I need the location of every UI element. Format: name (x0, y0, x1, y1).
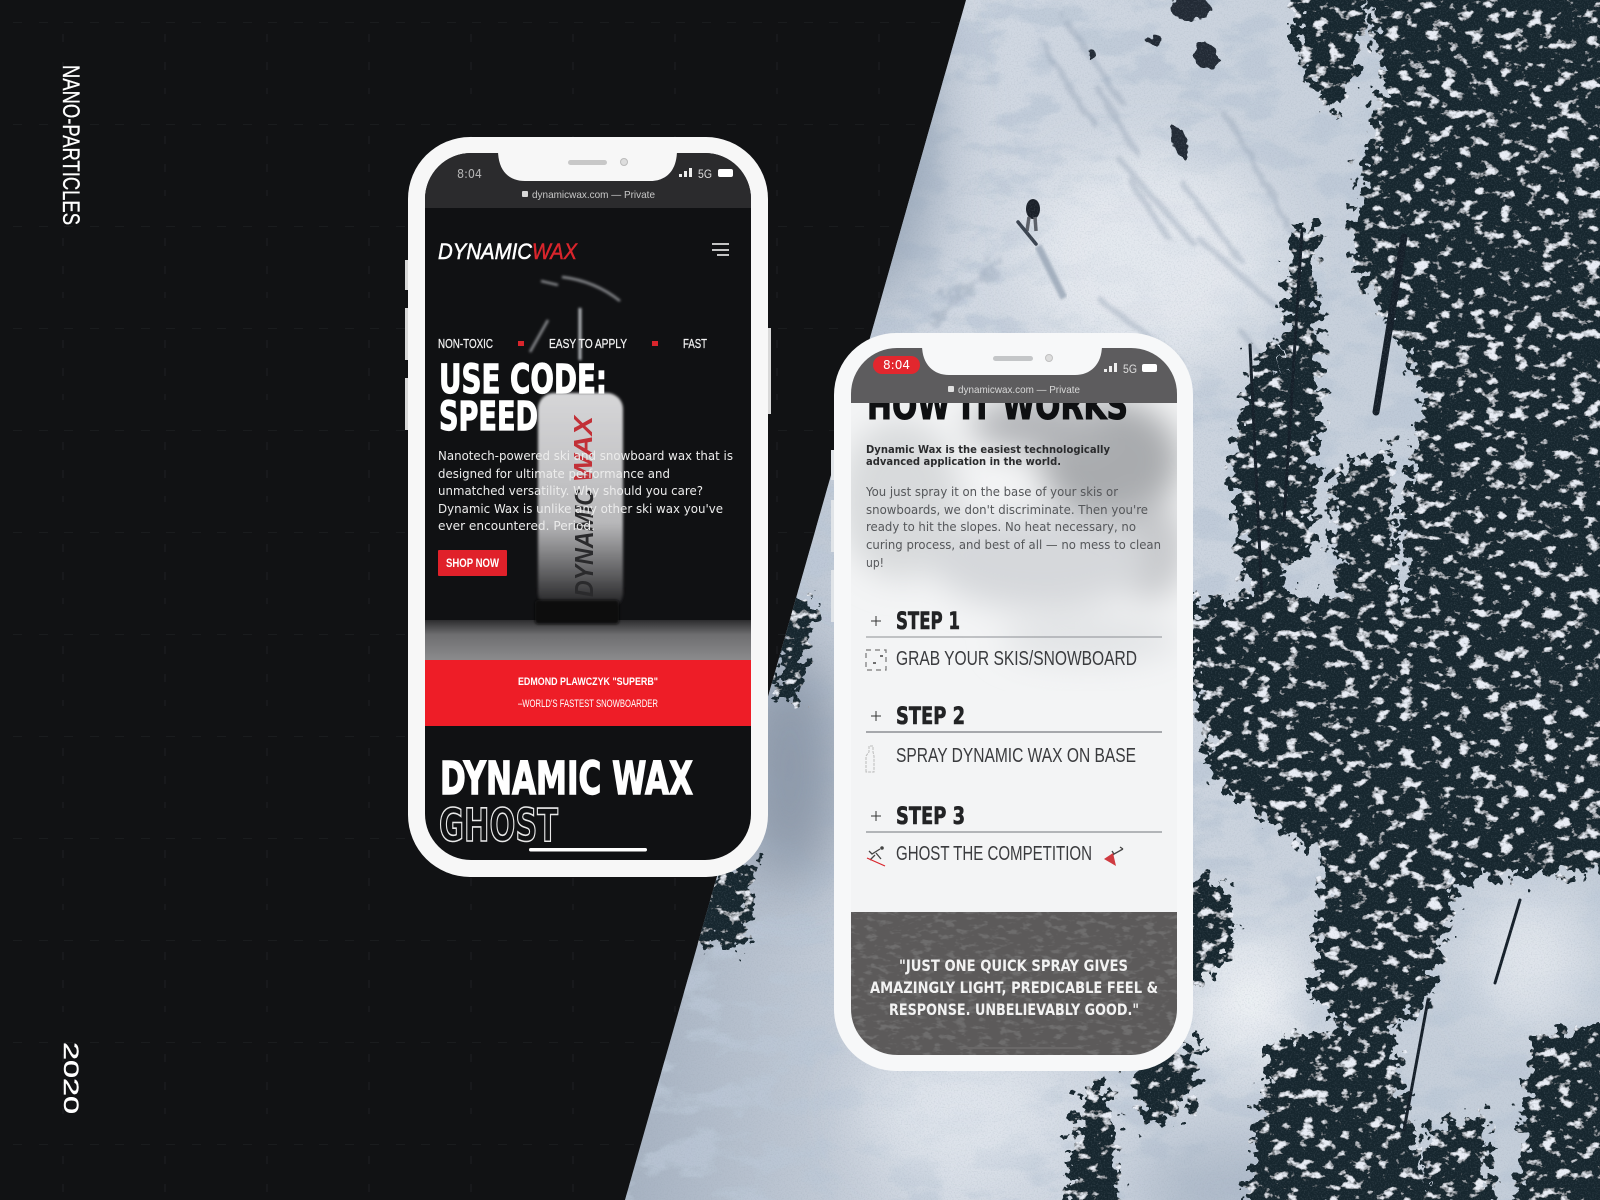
screen (840, 348, 1185, 1055)
step 3 (866, 802, 1162, 866)
phone 2: how it works (831, 333, 1193, 1071)
shop now button: SHOP NOW (446, 556, 500, 570)
quote panel (851, 912, 1177, 1055)
hero heading: USE CODE: (439, 357, 607, 403)
quote panel: AMAZINGLY LIGHT, PREDICABLE FEEL & (870, 978, 1158, 997)
hero heading: SPEED (439, 394, 538, 440)
hero bottle photo (530, 277, 623, 624)
trunks (1250, 230, 1520, 1130)
intro paragraph: You just spray it on the base of your skis or (865, 484, 1119, 499)
screen (425, 153, 751, 860)
status bar: 5G (698, 167, 712, 181)
hero paragraph (438, 448, 733, 533)
step 2: STEP 2 (896, 702, 965, 730)
hero bottle photo: WAX (568, 414, 598, 482)
step 2: SPRAY DYNAMIC WAX ON BASE (896, 745, 1136, 767)
intro bold text: advanced application in the world. (866, 456, 1061, 468)
intro paragraph: ready to hit the slopes. No heat necessary, no (866, 519, 1136, 534)
shop now button (438, 550, 507, 576)
step 1: GRAB YOUR SKIS/SNOWBOARD (896, 648, 1137, 670)
logo: WAX (532, 239, 578, 264)
step 3: GHOST THE COMPETITION (896, 843, 1092, 865)
hero paragraph: Dynamic Wax is unlike any other ski wax you've (438, 501, 723, 516)
status bar: 8:04 (883, 358, 910, 372)
hero floor (425, 620, 751, 662)
status bar (425, 153, 751, 208)
status bar: dynamicwax.com — Private (532, 189, 655, 201)
smoke texture (840, 397, 1185, 664)
phone body (831, 333, 1193, 1071)
feature tags (438, 338, 707, 348)
logo: DYNAMIC (438, 239, 532, 264)
background: snowy mountain photo (600, 0, 1600, 1200)
hero paragraph: Nanotech-powered ski and snowboard wax that is (438, 448, 733, 463)
intro bold text (866, 444, 1110, 468)
feature tags: FAST (683, 336, 707, 351)
intro paragraph: snowboards, we don't discriminate. Then you're (866, 502, 1148, 517)
intro paragraph: curing process, and best of all — no mess to clean (866, 537, 1161, 552)
intro paragraph: up! (866, 555, 884, 570)
status bar: 8:04 (457, 167, 482, 181)
hero paragraph: unmatched versatility. Why should you care? (438, 483, 703, 498)
status bar: dynamicwax.com — Private (958, 384, 1080, 396)
quote panel: "JUST ONE QUICK SPRAY GIVES (899, 956, 1128, 975)
step 2 (866, 702, 1162, 772)
slope drift streaks (930, 20, 1290, 390)
intro paragraph (865, 484, 1161, 570)
notch (922, 345, 1102, 375)
red testimonial band (425, 660, 751, 726)
intro bold text: Dynamic Wax is the easiest technologically (866, 444, 1110, 456)
status bar (851, 348, 1177, 403)
product title: DYNAMIC WAX (440, 752, 693, 805)
feature tags: EASY TO APPLY (549, 336, 627, 351)
step 1: STEP 1 (896, 607, 960, 635)
phone 1: home screen (405, 137, 771, 877)
snow highlights (740, 0, 1590, 1200)
phone body (405, 137, 771, 877)
home indicator (529, 848, 647, 852)
step 1 (866, 607, 1162, 670)
vertical label: year: 2020 (59, 1042, 82, 1114)
logo (438, 243, 578, 260)
conifer forest masses (695, 0, 1600, 1200)
hero paragraph: ever encountered. Period. (438, 518, 595, 533)
menu icon (712, 244, 729, 255)
outlined ghost word: GHOST (439, 799, 558, 852)
hero paragraph: designed for ultimate performance and (438, 466, 670, 481)
heading clipped under address bar: HOW IT WORKS (867, 384, 1128, 428)
red testimonial band: EDMOND PLAWCZYK "SUPERB" (518, 676, 658, 688)
red testimonial band: –WORLD'S FASTEST SNOWBOARDER (518, 698, 658, 710)
snowboarder (1018, 199, 1064, 298)
rocks (1089, 0, 1223, 159)
status bar: 5G (1123, 362, 1137, 376)
notch (498, 150, 677, 181)
vertical label: nano-particles: NANO-PARTICLES (57, 65, 84, 225)
quote panel: RESPONSE. UNBELIEVABLY GOOD." (889, 1000, 1139, 1019)
step 3: STEP 3 (896, 802, 965, 830)
hero heading (440, 362, 604, 432)
hero bottle photo: DYNAMIC (569, 488, 599, 597)
feature tags: NON-TOXIC (438, 336, 493, 351)
